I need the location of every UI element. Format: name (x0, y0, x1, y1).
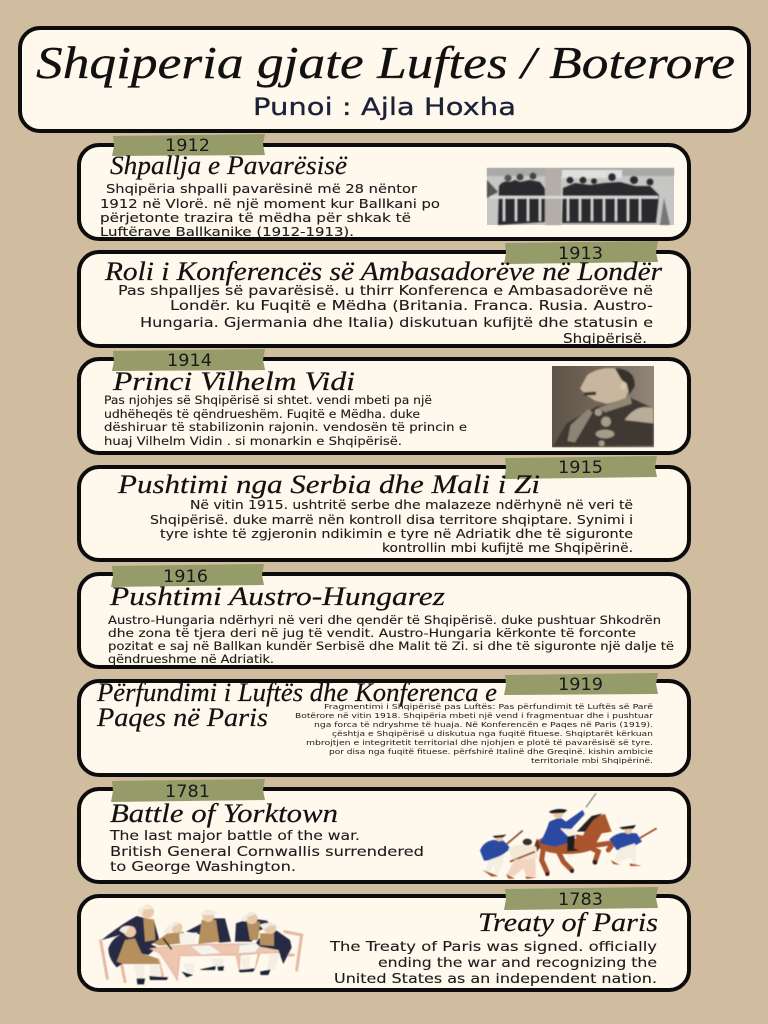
year ribbon 1781 (111, 779, 265, 802)
body text: Në vitin 1915. ushtritë serbe dhe malazeze ndërhynë në veri të (190, 498, 633, 512)
body text (104, 393, 467, 448)
body text: huaj Vilhelm Vidin . si monarkin e Shqipërisë. (104, 434, 402, 448)
year ribbon 1914 (112, 349, 265, 371)
year ribbon 1919: 1919 (558, 675, 603, 695)
heading: Battle of Yorktown (110, 799, 338, 828)
chairs (101, 932, 302, 982)
body text: dëshiruar të stabilizonin rajonin. vendosën të princin e (104, 420, 467, 434)
body text: United States as an independent nation. (334, 971, 657, 987)
body text (100, 181, 440, 239)
panel: 1916 Austro-Hungarian occupation (79, 564, 689, 667)
leaning delegate centre left (153, 922, 184, 946)
body text (108, 614, 674, 666)
body text: kontrollin mbi kufijtë me Shqipërinë. (382, 541, 633, 555)
body text: The Treaty of Paris was signed. officially (329, 939, 657, 955)
body text (118, 283, 653, 347)
heading: Shpallja e Pavarësisë (110, 151, 347, 180)
body text: nga forca të ndryshme të huaja. Në Konferencën e Paqes në Paris (1919). (314, 720, 653, 729)
body text: British General Cornwallis surrendered (110, 844, 424, 860)
body text: përjetonte trazira të mëdha për shkak të (100, 210, 411, 225)
year ribbon 1783: 1783 (558, 890, 603, 910)
body text: pozitat e saj në Ballkan kundër Serbisë dhe Malit të Zi. si dhe të siguronte një dalje të (108, 640, 674, 653)
year ribbon 1916: 1916 (163, 567, 208, 587)
title panel (20, 28, 749, 131)
body text: mbrojtjen e integritetit territorial dhe njohjen e plotë të pavarësisë së tyre. (306, 738, 653, 747)
body text: Londër. ku Fuqitë e Mëdha (Britania. Franca. Rusia. Austro- (170, 298, 653, 314)
left soldier (480, 831, 523, 877)
body text: Shqipërisë. duke marrë nën kontroll disa territore shqiptare. Synimi i (150, 513, 633, 527)
heading: Princi Vilhelm Vidi (112, 367, 355, 396)
body text: Hungaria. Gjermania dhe Italia) diskutuan kufijtë dhe statusin e (140, 315, 653, 331)
seated delegate right (256, 923, 292, 975)
body text: territoriale mbi Shqipërinë. (531, 756, 653, 765)
heading: Pushtimi nga Serbia dhe Mali i Zi (117, 470, 540, 499)
body text: Luftërave Ballkanike (1912-1913). (100, 224, 354, 239)
panel: 1913 conference (79, 241, 689, 347)
right soldier (609, 825, 657, 866)
heading: Paqes në Paris (96, 703, 268, 732)
heading: Pushtimi Austro-Hungarez (109, 582, 445, 611)
body text (150, 498, 633, 555)
body text: tyre ishte të zgjeronin ndikimin e tyre në Adriatik dhe të siguronte (160, 527, 633, 541)
year ribbon 1781: 1781 (165, 782, 210, 802)
author subtitle: Punoi : Ajla Hoxha (253, 93, 516, 121)
heading (96, 678, 497, 732)
year ribbon 1914: 1914 (167, 351, 212, 371)
centre delegate (182, 910, 231, 977)
panel: 1915 Serbian occupation (79, 456, 689, 560)
panel: 1912 independence (79, 134, 689, 239)
body text: Botërore në vitin 1918. Shqipëria mbeti një vend i fragmentuar dhe i pushtuar (295, 711, 654, 720)
heading: Përfundimi i Luftës dhe Konferenca e (96, 678, 497, 707)
photo: declaration balcony (487, 168, 674, 225)
year ribbon 1912: 1912 (165, 136, 210, 156)
year ribbon 1913 (504, 241, 658, 264)
body text: to George Washington. (110, 859, 296, 875)
body text: Shqipëria shpalli pavarësinë më 28 nëntor (106, 181, 418, 196)
middle soldier (506, 839, 538, 879)
body text: çështja e Shqipërisë u diskutua nga fuqitë fituese. Shqiptarët kërkuan (332, 729, 653, 738)
table (150, 933, 282, 981)
body text: 1912 në Vlorë. në një moment kur Ballkani po (100, 196, 440, 211)
body text: qëndrueshme në Adriatik. (108, 653, 274, 666)
year ribbon 1912 (112, 134, 265, 156)
standing delegate left (102, 905, 159, 947)
rider (539, 793, 596, 851)
body text: Shqipërisë. (563, 331, 647, 347)
body text: Austro-Hungaria ndërhyri në veri dhe qendër të Shqipërisë. duke pushtuar Shkodrën (108, 614, 661, 627)
icon: delegates signing treaty (101, 905, 302, 984)
body text: dhe zona të tjera deri në jug të vendit. Austro-Hungaria kërkonte të forconte (108, 627, 636, 640)
heading: Roli i Konferencës së Ambasadorëve në Londër (104, 257, 663, 286)
heading: Treaty of Paris (478, 908, 658, 937)
year ribbon 1915 (504, 456, 657, 479)
year ribbon 1783 (504, 887, 658, 910)
year ribbon 1916 (111, 564, 264, 587)
icon: soldiers and mounted officer (480, 793, 657, 879)
panel: 1919 peace conference (79, 673, 689, 775)
panel: 1781 Battle of Yorktown (79, 779, 689, 882)
body text: The last major battle of the war. (109, 828, 360, 844)
year ribbon 1919 (504, 673, 658, 695)
body text: udhëheqës të qëndrueshëm. Fuqitë e Mëdha. duke (104, 407, 420, 421)
body text: por disa nga fuqitë fituese. përfshirë Italinë dhe Greqinë. kishin ambicie (329, 747, 654, 756)
body text: Fragmentimi i Shqipërisë pas Luftës: Pas përfundimit të Luftës së Parë (324, 702, 654, 711)
horse (533, 813, 614, 876)
panel: 1783 Treaty of Paris (79, 887, 689, 990)
photo: Prince Wilhelm portrait (552, 366, 654, 447)
body text (329, 939, 657, 987)
year ribbon 1913: 1913 (558, 244, 603, 264)
body text (295, 702, 654, 765)
year ribbon 1915: 1915 (558, 458, 603, 478)
body text: Pas shpalljes së pavarësisë. u thirr Konferenca e Ambasadorëve në (118, 283, 653, 299)
body text (109, 828, 424, 875)
panel: 1914 Prince Wilhelm (79, 349, 689, 453)
body text: ending the war and recognizing the (378, 955, 657, 971)
body text: Pas njohjes së Shqipërisë si shtet. vendi mbeti pa një (104, 393, 432, 407)
standing delegate right (235, 913, 273, 972)
seated delegate front left (108, 926, 168, 984)
title: Shqiperia gjate Luftes / Boterore (36, 37, 735, 88)
